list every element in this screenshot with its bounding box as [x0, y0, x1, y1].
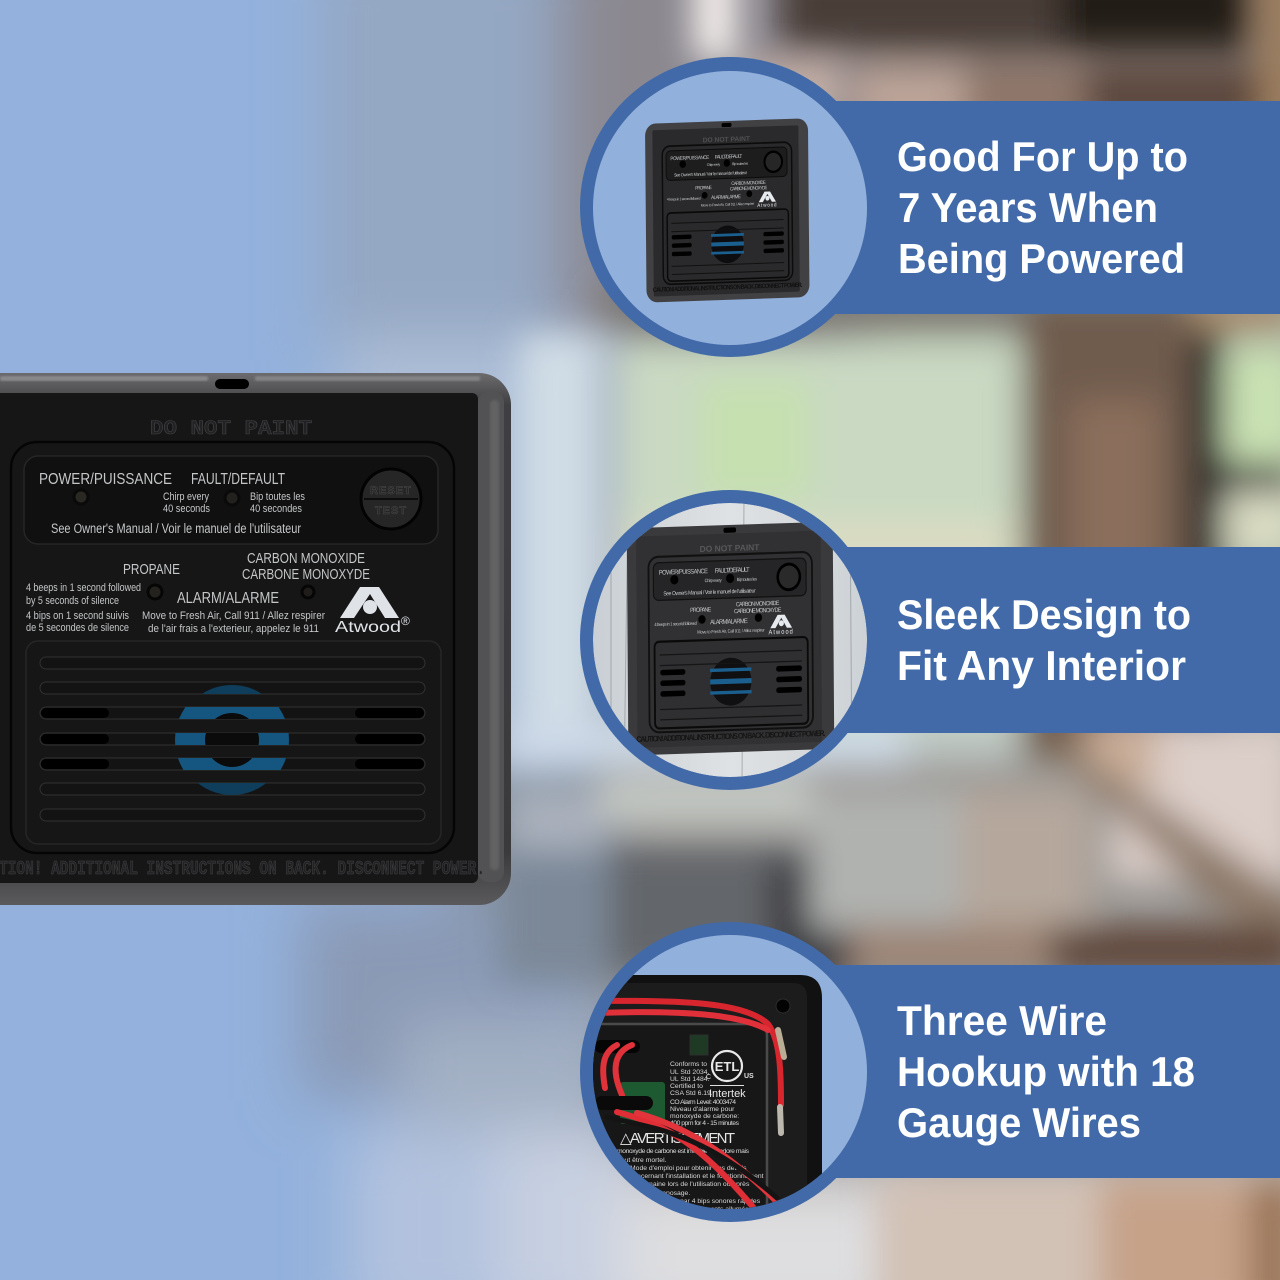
inner label module: CSA Std 6.19. — [670, 1090, 713, 1097]
control label panel: Bip toutes les — [250, 491, 305, 503]
alarm label text: Move to Fresh Air, Call 911 / Allez respirer — [142, 610, 325, 622]
inner label module: voyants allumés — [700, 1206, 749, 1213]
circle photo: front view: Chirp every — [707, 162, 720, 167]
circle photo: wall mounted — [593, 500, 867, 780]
alarm label text: 4 bips on 1 second suivis — [26, 610, 129, 622]
control label panel: See Owner's Manual / Voir le manuel de l'utilisateur — [51, 521, 301, 536]
circle photo: wall mounted: ALARM/ALARME — [710, 618, 748, 626]
inner label module: Conforms to — [670, 1061, 707, 1068]
heading 1: Good For Up to — [897, 133, 1188, 180]
ring 2 — [580, 490, 880, 790]
inner label module: 400 ppm for 4 - 15 minutes — [670, 1120, 740, 1127]
circle photo: wall mounted: Move to Fresh Air, Call 911 / Allez respirer — [697, 627, 765, 635]
atwood logo — [335, 587, 410, 636]
circle photo: front view: FAULT/DEFAULT — [715, 154, 742, 161]
circle photo: front view: ALARM/ALARME — [711, 194, 742, 201]
atwood logo: Atwood — [335, 619, 401, 636]
heading 3: Gauge Wires — [897, 1099, 1141, 1146]
inner label module: semaine lors de l'utilisation ou après — [640, 1181, 750, 1188]
embossed text: do not paint: DO NOT PAINT — [150, 418, 312, 441]
circle photo: wall mounted: Atwood — [768, 628, 793, 636]
ETL mark — [706, 1051, 754, 1100]
ETL mark: C — [706, 1074, 711, 1081]
reset test button: RESET — [370, 485, 412, 497]
circle photo: front view: 4 beeps in 1 second followed — [667, 196, 701, 202]
control label panel — [24, 456, 438, 544]
circle photo: front view: DO NOT PAINT — [703, 135, 750, 144]
inner label module — [593, 1022, 768, 1209]
circle photo: wall mounted: FAULT/DEFAULT — [715, 566, 750, 575]
inner label module: peut être mortel. — [617, 1157, 667, 1164]
circle photo: front view — [593, 71, 867, 345]
reset test button: TEST — [375, 505, 407, 517]
control label panel: 40 secondes — [250, 503, 302, 515]
alarm label text: ALARM/ALARME — [177, 590, 279, 607]
circle photo: front view: See Owner's Manual / Voir le manuel de l'utilisateur — [674, 170, 748, 178]
alarm label text: CARBON MONOXIDE — [247, 551, 365, 567]
fan seen through slots — [175, 707, 289, 770]
inner label module: Certified to — [670, 1083, 703, 1090]
circle photo: wall mounted: Chirp every — [705, 577, 722, 583]
alarm label text: CARBONE MONOXYDE — [242, 567, 370, 583]
circle photo: wall mounted: DO NOT PAINT — [700, 543, 760, 554]
inner label module: UL Std 1484. — [670, 1076, 710, 1083]
circle photo: front view: Move to Fresh Air, Call 911 / Allez respirer — [701, 202, 755, 208]
control label panel: FAULT/DEFAULT — [191, 471, 285, 488]
circle photo: back with wires — [593, 935, 867, 1209]
heading 2: Sleek Design to — [897, 591, 1191, 638]
reset test button — [361, 469, 421, 529]
heading 3: Three Wire — [897, 997, 1107, 1044]
alarm label text: 4 beeps in 1 second followed — [26, 582, 141, 594]
ring 1 — [580, 57, 880, 357]
circle photo: front view: Bip toutes les — [732, 161, 748, 166]
heading 3: Hookup with 18 — [897, 1048, 1195, 1095]
circle photo: front view: CARBON MONOXIDE — [731, 180, 766, 186]
circle photo: wall mounted: See Owner's Manual / Voir le manuel de l'utilisateur — [663, 588, 756, 598]
inner label module: concernant l'installation et le fonctionnement — [630, 1173, 764, 1180]
band 3 — [730, 965, 1280, 1178]
inner label module: △AVERTISSEMENT — [620, 1130, 735, 1147]
inner label module: CO Alarm Level: 4003474 — [670, 1099, 736, 1106]
circle photo: wall mounted: PROPANE — [690, 607, 711, 614]
circle photo: front view: CARBONE MONOXYDE — [730, 185, 767, 192]
band 1 — [730, 101, 1280, 314]
inner label module: Niveau d'alarme pour — [670, 1106, 735, 1113]
heading 1: Being Powered — [898, 235, 1185, 282]
circle photo: wall mounted: Bip toutes les — [737, 576, 758, 582]
feature 1: seven years — [580, 57, 1280, 357]
control label panel: 40 seconds — [163, 503, 210, 515]
ETL mark: Intertek — [709, 1088, 746, 1100]
alarm label text: de 5 secondes de silence — [26, 622, 129, 634]
circle photo: wall mounted: POWER/PUISSANCE — [659, 568, 708, 577]
band 2 — [730, 547, 1280, 733]
feature 2: sleek design — [580, 490, 1280, 790]
inner label module: par 4 bips sonores rapides — [680, 1198, 761, 1205]
inner label module: monoxyde de carbone est invisible et inodore mais — [617, 1148, 750, 1155]
alarm label text — [26, 551, 370, 635]
inner label module: monoxyde de carbone: — [670, 1113, 739, 1120]
red and black wires — [595, 1001, 784, 1207]
ETL mark: ETL — [715, 1059, 739, 1074]
inner label module: UL Std 2034, — [670, 1069, 710, 1076]
circle photo: front view: POWER/PUISSANCE — [670, 155, 710, 162]
back housing — [593, 975, 822, 1209]
heading 2: Fit Any Interior — [897, 642, 1186, 689]
atwood logo: ® — [401, 614, 410, 628]
control label panel: Chirp every — [163, 491, 209, 503]
alarm label text: de l'air frais a l'exterieur, appelez le 911 — [148, 623, 319, 635]
circle photo: front view: Atwood — [757, 202, 777, 209]
feature 3: three wire hookup — [580, 922, 1280, 1222]
big alarm product photo — [0, 373, 511, 905]
inner label module: reposage. — [660, 1190, 690, 1197]
inner label module: Mode d'emploi pour obtenir des détails — [630, 1165, 747, 1172]
speaker grille — [26, 641, 441, 844]
ETL mark: US — [744, 1073, 754, 1080]
alarm label text: by 5 seconds of silence — [26, 595, 119, 607]
heading 3 — [897, 997, 1195, 1146]
circle photo: wall mounted: CAUTION! ADDITIONAL INSTRUCTIONS ON BACK. DISCONNECT POWER. — [636, 728, 825, 744]
heading 1 — [897, 133, 1188, 282]
circle photo: front view: PROPANE — [695, 185, 712, 191]
circle photo: wall mounted: 4 beeps in 1 second followed — [654, 620, 697, 627]
heading 1: 7 Years When — [898, 184, 1158, 231]
ring 3 — [580, 922, 880, 1222]
circle photo: wall mounted: CARBONE MONOXYDE — [734, 607, 781, 615]
heading 2 — [897, 591, 1191, 689]
circle photo: front view: CAUTION! ADDITIONAL INSTRUCTIONS ON BACK. DISCONNECT POWER. — [653, 283, 803, 294]
control label panel: POWER/PUISSANCE — [39, 471, 172, 488]
circle photo: wall mounted: CARBON MONOXIDE — [736, 601, 780, 609]
alarm label text: PROPANE — [123, 562, 180, 578]
fan arcs, top and bottom slots — [198, 685, 266, 795]
